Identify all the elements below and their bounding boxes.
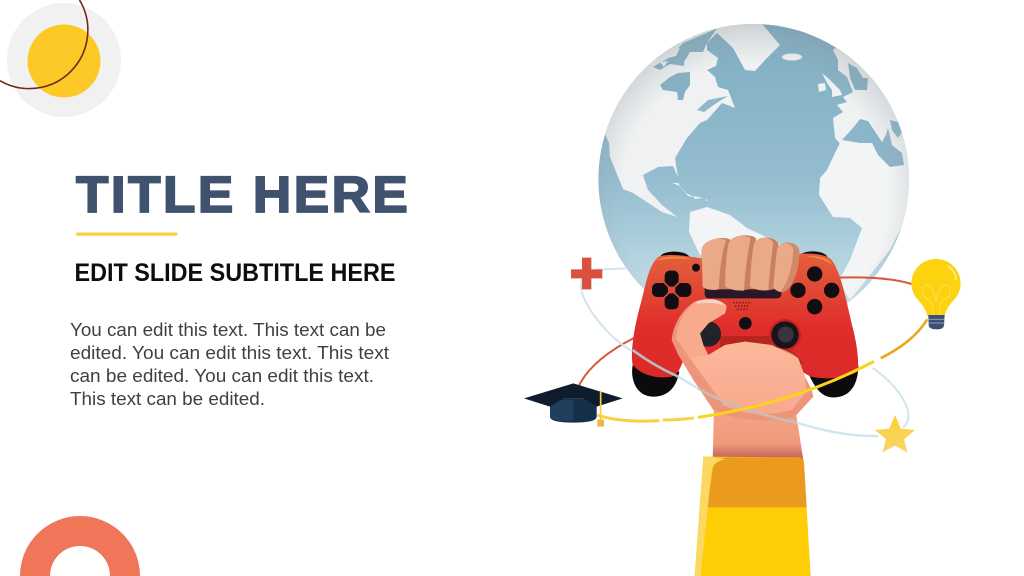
body text: can be edited. You can edit this text. bbox=[70, 366, 374, 386]
body text: edited. You can edit this text. This text bbox=[70, 343, 389, 363]
wrist bbox=[713, 407, 803, 460]
grip slot bbox=[705, 285, 781, 298]
palm shadow bbox=[720, 336, 803, 363]
decorative circle: top left bbox=[0, 0, 121, 117]
speaker dots bbox=[733, 303, 752, 309]
globe bbox=[598, 24, 909, 304]
land: Caribbean islands bbox=[672, 183, 708, 201]
land: British Isles bbox=[818, 73, 842, 97]
body text: This text can be edited. bbox=[70, 389, 265, 409]
title underline bbox=[76, 232, 178, 236]
right thumbstick bbox=[769, 319, 801, 351]
icon: graduation cap bbox=[524, 383, 623, 427]
hand outline and thumb bbox=[672, 300, 813, 421]
subtitle: EDIT SLIDE SUBTITLE HERE bbox=[74, 259, 396, 287]
orbit lines behind controller bbox=[579, 268, 912, 427]
land: Greenland bbox=[717, 24, 780, 71]
icon: plus bbox=[571, 258, 602, 289]
controller grips bbox=[632, 365, 679, 397]
land: North and Central America bbox=[605, 28, 735, 217]
land: Iceland bbox=[782, 54, 802, 60]
Baltic Sea bbox=[848, 63, 868, 90]
hand bbox=[672, 235, 813, 460]
d-pad bbox=[652, 271, 691, 309]
land: Africa bbox=[819, 141, 909, 300]
decorative ring: bottom left bbox=[20, 516, 140, 576]
icon: star bbox=[875, 415, 915, 453]
orbit lines in front of controller bbox=[597, 319, 927, 436]
arctic islands bbox=[660, 48, 680, 67]
left thumbstick bbox=[696, 321, 721, 347]
land: South America bbox=[689, 207, 780, 255]
fist base bbox=[707, 250, 785, 289]
controller body bbox=[632, 254, 858, 378]
Black Sea bbox=[890, 120, 902, 138]
icon: light bulb bbox=[911, 259, 961, 329]
title: TITLE HERE bbox=[76, 167, 408, 224]
body text: You can edit this text. This text can be bbox=[70, 320, 386, 340]
sleeve bbox=[695, 456, 811, 576]
shoulder highlights bbox=[657, 256, 833, 266]
fingers bbox=[702, 235, 799, 292]
Hudson Bay bbox=[660, 72, 690, 100]
arctic waters bbox=[653, 28, 717, 70]
palm bbox=[690, 342, 807, 414]
shoulder buttons bbox=[660, 252, 689, 257]
face buttons bbox=[692, 264, 839, 330]
thumb highlight bbox=[676, 300, 727, 358]
Gulf of St Lawrence bbox=[697, 96, 728, 112]
Mediterranean Sea bbox=[842, 119, 904, 167]
land: Europe bbox=[833, 48, 906, 148]
body text bbox=[70, 320, 389, 409]
game controller bbox=[632, 251, 858, 397]
